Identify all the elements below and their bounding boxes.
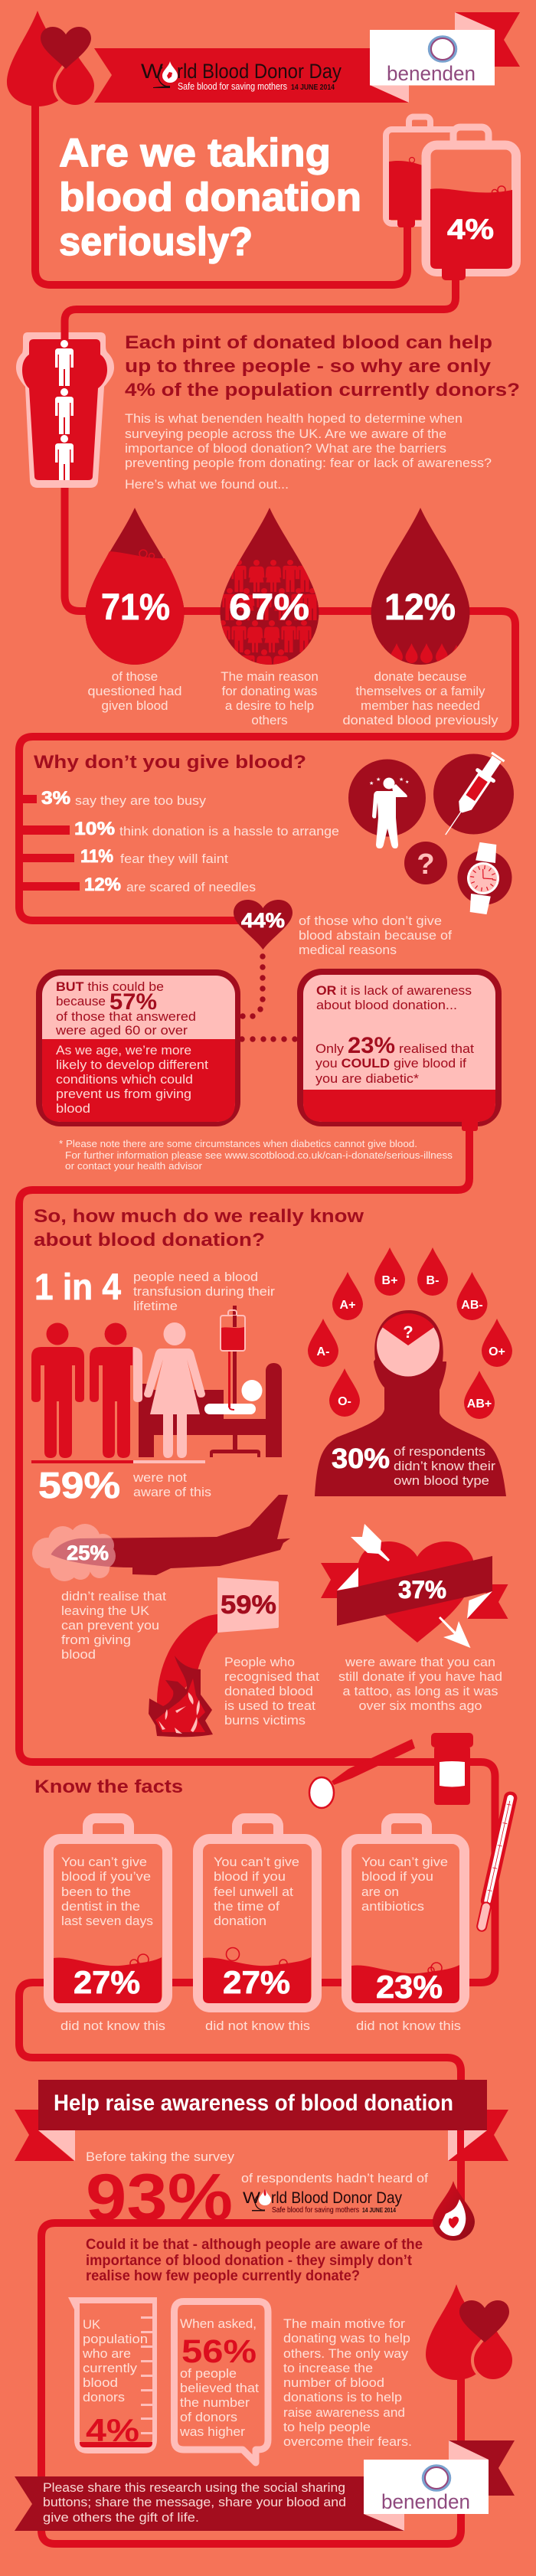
footnote: For further information please see www.scotblood.co.uk/can-i-donate/serious-illness — [65, 1149, 453, 1161]
title: blood donation — [59, 175, 361, 220]
World Blood Donor Day logo, lower — [243, 2189, 402, 2215]
icon: lower drops with heart — [426, 2284, 514, 2381]
blood bag: unwell 27%: feel unwell at — [214, 1885, 293, 1899]
stat: 1 in 4: 1 in 4 — [34, 1267, 121, 1308]
illustration: beaker 4% — [68, 2297, 157, 2453]
intro text: importance of blood donation? What are the barriers — [125, 441, 446, 456]
heart: 44% — [234, 900, 293, 950]
blood group drops: B- — [427, 1274, 439, 1287]
blood group drops: B+ — [382, 1274, 397, 1287]
caption: 67% — [221, 669, 319, 727]
icon: dental mirror — [309, 1739, 415, 1808]
text: main motive: raise awareness and — [283, 2405, 405, 2420]
speech bubble: 56%: was higher — [179, 2424, 245, 2439]
drop: 71% — [86, 508, 184, 665]
caption: 71% — [87, 669, 182, 713]
blood group drops: A- — [317, 1345, 329, 1358]
speech bubble: 56%: the number — [180, 2395, 250, 2410]
bar list: reasons for not giving: 10% — [74, 819, 115, 839]
panel: OR 23%: you COULD give blood if — [315, 1056, 466, 1071]
caption: 59% burns: People who — [224, 1655, 295, 1669]
stat: 1 in 4: transfusion during their — [133, 1284, 275, 1299]
caption: 12%: themselves or a family — [355, 684, 485, 698]
panel: OR 23%: about blood donation... — [316, 998, 457, 1012]
illustration: beaker 4%: currently — [83, 2361, 138, 2375]
illustration: people figures — [31, 1322, 205, 1463]
text: main motive — [283, 2316, 412, 2449]
caption: 44% — [299, 914, 452, 957]
stat: 59% not aware — [38, 1466, 211, 1506]
heart: 44%: 44% — [241, 909, 285, 932]
heading: how much do we know: So, how much do we really know — [34, 1206, 364, 1227]
caption: 59% burns: burns victims — [224, 1713, 306, 1728]
blood bag: antibiotics 23%: blood if you — [361, 1869, 433, 1884]
blood group drops: AB- — [461, 1299, 483, 1312]
icon: fainting person: ★ — [369, 780, 374, 786]
illustration: head silhouette with 30%: own blood type — [394, 1473, 489, 1488]
illustration: beaker 4%: donors — [83, 2390, 125, 2404]
blood bag: dentist 27%: did not know this — [60, 2019, 165, 2033]
blood bag: antibiotics 23%: antibiotics — [361, 1899, 424, 1914]
panel: BUT 57%: likely to develop different — [56, 1058, 208, 1072]
icon: fainting person: ★ — [376, 776, 381, 783]
bar list: reasons for not giving: say they are too busy — [75, 793, 207, 808]
bar list: reasons for not giving: 12% — [84, 874, 121, 895]
caption: 37% tattoo: a tattoo, as long as it was — [343, 1684, 498, 1698]
panel: OR 23%: Only — [315, 1041, 345, 1056]
blood bag: unwell 27%: blood if you — [214, 1869, 286, 1884]
blood bag: antibiotics 23%: are on — [361, 1885, 399, 1899]
speech bubble: 56%: believed that — [180, 2381, 259, 2395]
caption: 67%: others — [251, 713, 288, 727]
banner: help raise awareness: Help raise awareness of blood donation — [54, 2091, 453, 2116]
speech bubble: 56%: of people — [180, 2366, 237, 2381]
illustration: head silhouette with 30%: ? — [403, 1322, 413, 1342]
icon: WHO drop with mother and child — [433, 2181, 475, 2241]
caption: 44%: of those who don’t give — [299, 914, 442, 928]
dotted connectors — [239, 953, 298, 1042]
caption: 37% tattoo: over six months ago — [358, 1698, 482, 1713]
intro text: preventing people from donating: fear or lack of awareness? — [125, 456, 492, 470]
caption: 67%: for donating was — [222, 684, 317, 698]
icon: fainting person: ★ — [405, 780, 409, 785]
blood bag: dentist 27%: 27% — [74, 1964, 140, 2000]
stat: 93%: 93% — [86, 2161, 233, 2234]
caption: 37% tattoo — [338, 1655, 502, 1713]
World Blood Donor Day logo, lower: rld Blood Donor Day — [271, 2189, 402, 2207]
stat: 1 in 4 — [34, 1267, 275, 1313]
blood bag: antibiotics 23% — [346, 1818, 464, 2033]
blood bag: unwell 27%: the time of — [214, 1899, 279, 1914]
text: main motive: The main motive for — [283, 2316, 405, 2331]
caption: 71%: questioned had — [87, 684, 182, 698]
bar list: reasons for not giving: fear they will faint — [120, 852, 228, 866]
bottom ribbon with share message and logo: buttons; share the message, share your blood and — [43, 2495, 346, 2509]
title: Are we taking — [59, 131, 331, 175]
World Blood Donor Day logo, lower: W — [243, 2189, 260, 2207]
heading: why don't you give blood: Why don’t you give blood? — [34, 752, 306, 773]
stat: 59% not aware: were not — [132, 1470, 187, 1485]
panel: BUT 57%: BUT this could be — [56, 979, 164, 994]
blood bag: unwell 27%: You can’t give — [214, 1855, 299, 1869]
bottom ribbon with share message and logo — [15, 2440, 515, 2531]
caption: 44%: medical reasons — [299, 943, 397, 957]
blood bag: dentist 27%: dentist in the — [61, 1899, 140, 1914]
blood group drops: AB+ — [467, 1398, 492, 1411]
World Blood Donor Day logo: 14 JUNE 2014 — [291, 83, 335, 92]
stat: 59% not aware: 59% — [38, 1466, 120, 1506]
caption: 25%: leaving the UK — [61, 1603, 150, 1618]
blood bag: unwell 27%: did not know this — [205, 2019, 310, 2033]
World Blood Donor Day logo, lower: 14 JUNE 2014 — [362, 2207, 396, 2214]
illustration: aeroplane and cloud with 25% — [32, 1495, 290, 1581]
heading: each pint — [125, 332, 520, 400]
blood bag: unwell 27%: donation — [214, 1914, 266, 1928]
bar list: reasons for not giving: think donation is a hassle to arrange — [119, 824, 339, 839]
illustration: beaker 4%: who are — [82, 2346, 131, 2361]
heading: each pint: 4% of the population currently donors? — [125, 380, 520, 400]
panel: BUT 57%: conditions which could — [56, 1072, 193, 1087]
panel: OR 23%: 23% — [348, 1033, 395, 1058]
panel: BUT 57%: As we age, we’re more — [56, 1043, 191, 1058]
question: could it be that: realise how few people currently donate? — [86, 2268, 360, 2284]
footnote: or contact your health advisor — [65, 1160, 203, 1172]
drop: 12% — [371, 508, 470, 665]
caption: 59% burns: is used to treat — [224, 1698, 315, 1713]
blood bag: unwell 27% — [198, 1818, 317, 2033]
World Blood Donor Day logo: Safe blood for saving mothers — [178, 80, 287, 92]
icon: pint glass with three people — [16, 329, 114, 488]
title — [59, 131, 361, 264]
illustration: head silhouette with 30%: 30% — [332, 1443, 390, 1474]
illustration: head silhouette with 30%: didn’t know their — [394, 1459, 495, 1473]
panel: OR 23%: OR it is lack of awareness — [316, 983, 472, 998]
World Blood Donor Day logo — [141, 60, 342, 92]
intro text — [125, 411, 492, 492]
question: could it be that: Could it be that - although people are aware of the — [86, 2237, 423, 2253]
caption: 37% tattoo: still donate if you have had — [338, 1669, 502, 1684]
World Blood Donor Day logo, lower: Safe blood for saving mothers — [272, 2206, 359, 2215]
text: main motive: to help people — [283, 2420, 371, 2434]
bar list: reasons for not giving: 3% — [41, 788, 70, 809]
panel: BUT 57%: because — [56, 994, 106, 1008]
illustration: aeroplane and cloud with 25%: 25% — [67, 1541, 109, 1564]
text: main motive: overcome their fears. — [283, 2434, 412, 2449]
blood group drops: O- — [338, 1395, 351, 1408]
illustration: hospital bed and patient — [139, 1306, 282, 1457]
blood bag: dentist 27%: blood if you’ve — [61, 1869, 151, 1884]
drop: 12%: 12% — [384, 587, 456, 628]
question: could it be that: importance of blood donation - they simply don’t — [86, 2253, 413, 2269]
intro text: surveying people across the UK. Are we aware of the — [125, 427, 446, 441]
caption: 25% — [61, 1589, 166, 1662]
stat: 59% not aware: aware of this — [133, 1485, 211, 1499]
World Blood Donor Day logo: W — [141, 60, 164, 83]
World Blood Donor Day logo: rld Blood Donor Day — [177, 60, 342, 83]
intro text: Here’s what we found out... — [125, 477, 289, 492]
blood bag: antibiotics 23%: did not know this — [356, 2019, 461, 2033]
caption: 12%: member has needed — [361, 698, 480, 713]
speech bubble: 56%: 56% — [181, 2333, 257, 2370]
panel: BUT 57%: prevent us from giving — [56, 1087, 191, 1101]
icon: fainting person: ★ — [399, 776, 404, 783]
bar list: reasons for not giving — [19, 788, 339, 895]
caption: 71%: given blood — [102, 698, 168, 713]
illustration: beaker 4%: 4% — [86, 2412, 139, 2448]
blood group drops: A+ — [340, 1299, 355, 1312]
stat: 1 in 4: people need a blood — [133, 1270, 258, 1284]
icon: blood bags with 4% — [386, 116, 516, 280]
stat: 93% — [86, 2149, 428, 2234]
benenden logo: benenden — [387, 62, 476, 85]
illustration: beaker 4%: population — [83, 2332, 148, 2346]
illustration: head silhouette with 30%: of respondents — [394, 1444, 485, 1459]
heading: how much do we know: about blood donation? — [34, 1230, 265, 1250]
caption: 67%: a desire to help — [225, 698, 314, 713]
illustration: heart with arrow and 37% ribbon — [321, 1524, 508, 1648]
intro text: This is what benenden health hoped to determine when — [125, 411, 462, 426]
caption: 12%: donate because — [374, 669, 467, 684]
footnote: * Please note there are some circumstances when diabetics cannot give blood. — [59, 1138, 417, 1149]
benenden logo — [370, 30, 495, 86]
panel: OR 23%: realised that — [399, 1041, 474, 1056]
icon: pill bottle — [431, 1733, 473, 1805]
drop: 67% — [221, 508, 319, 665]
speech bubble: 56%: of donors — [180, 2410, 237, 2424]
caption: 71%: of those — [112, 669, 158, 684]
illustration: beaker 4%: UK — [83, 2317, 101, 2332]
bar list: reasons for not giving: 11% — [80, 846, 113, 867]
caption: 25%: blood — [61, 1647, 96, 1662]
blood bag: antibiotics 23%: 23% — [376, 1969, 443, 2005]
text: main motive: to increase the — [283, 2361, 373, 2375]
blood bag: dentist 27%: You can’t give — [61, 1855, 147, 1869]
panel: OR 23% — [297, 969, 502, 1131]
text: main motive: number of blood — [283, 2375, 384, 2390]
icon: fainting person — [348, 760, 426, 848]
panel: BUT 57%: 57% — [109, 989, 157, 1015]
title: seriously? — [59, 220, 253, 264]
question: could it be that — [86, 2237, 423, 2284]
panel: OR 23%: you are diabetic* — [315, 1071, 419, 1086]
heading: each pint: up to three people - so why are only — [125, 356, 492, 377]
icon: watch — [458, 842, 511, 915]
text: main motive: donations is to help — [283, 2390, 402, 2404]
illustration: beaker 4%: blood — [83, 2375, 118, 2390]
icon: syringe — [433, 750, 514, 842]
illustration: blood flow onto flames with 59%: 59% — [221, 1590, 276, 1620]
caption: 12%: donated blood previously — [343, 713, 498, 727]
icon: blood bags with 4%: 4% — [447, 214, 494, 245]
bottom ribbon with share message and logo: benenden — [381, 2490, 470, 2513]
icon: question mark: ? — [417, 848, 435, 881]
text: main motive: others. The only way — [283, 2346, 409, 2361]
drop: 71%: 71% — [101, 587, 170, 628]
caption: 67%: The main reason — [221, 669, 319, 684]
bar list: reasons for not giving: are scared of needles — [126, 880, 256, 894]
heading: each pint: Each pint of donated blood can help — [125, 332, 492, 353]
caption: 25%: can prevent you — [61, 1618, 159, 1633]
heading: know the facts: Know the facts — [34, 1777, 183, 1797]
caption: 37% tattoo: were aware that you can — [345, 1655, 495, 1669]
blood bag: dentist 27%: been to the — [61, 1885, 131, 1899]
bottom ribbon with share message and logo: give others the gift of life. — [43, 2510, 199, 2525]
blood group drops: O+ — [489, 1345, 505, 1358]
stat: 93%: Before taking the survey — [86, 2149, 235, 2164]
caption: 59% burns: donated blood — [224, 1684, 313, 1698]
panel: BUT 57% — [36, 969, 240, 1126]
icon: blood drops with heart — [7, 11, 96, 106]
stat: 93%: of respondents hadn’t heard of — [241, 2171, 428, 2185]
blood bag: dentist 27%: last seven days — [61, 1914, 153, 1928]
caption: 25%: didn’t realise that — [61, 1589, 166, 1603]
speech bubble: 56% — [175, 2302, 268, 2463]
icon: question mark — [404, 842, 447, 884]
blood bag: unwell 27%: 27% — [223, 1964, 290, 2000]
caption: 44%: blood abstain because of — [299, 928, 452, 943]
illustration: head silhouette with 30% — [315, 1310, 506, 1496]
blood bag: dentist 27% — [49, 1818, 167, 2033]
caption: 59% burns — [224, 1655, 319, 1728]
bottom ribbon with share message and logo: Please share this research using the social sharing — [43, 2480, 345, 2495]
drop: 67%: 67% — [229, 587, 309, 628]
blood bag: antibiotics 23%: You can’t give — [361, 1855, 448, 1869]
blood group drops — [308, 1247, 512, 1419]
banner: help raise awareness — [15, 2080, 508, 2222]
top ribbon banner — [94, 12, 520, 103]
footnote — [59, 1138, 453, 1172]
stat: 1 in 4: lifetime — [133, 1299, 178, 1313]
caption: 25%: from giving — [61, 1633, 131, 1647]
panel: BUT 57%: of those that answered — [56, 1009, 196, 1024]
icon: thermometer — [476, 1793, 516, 1932]
caption: 59% burns: recognised that — [224, 1669, 319, 1684]
speech bubble: 56%: When asked, — [180, 2316, 257, 2331]
panel: BUT 57%: were aged 60 or over — [55, 1023, 188, 1038]
illustration: heart with arrow and 37% ribbon: 37% — [398, 1576, 446, 1603]
illustration: blood flow onto flames with 59% — [149, 1577, 279, 1737]
text: main motive: donating was to help — [283, 2331, 410, 2346]
heading: how much do we know — [34, 1206, 364, 1250]
caption: 12% — [343, 669, 498, 727]
panel: BUT 57%: blood — [56, 1101, 90, 1116]
